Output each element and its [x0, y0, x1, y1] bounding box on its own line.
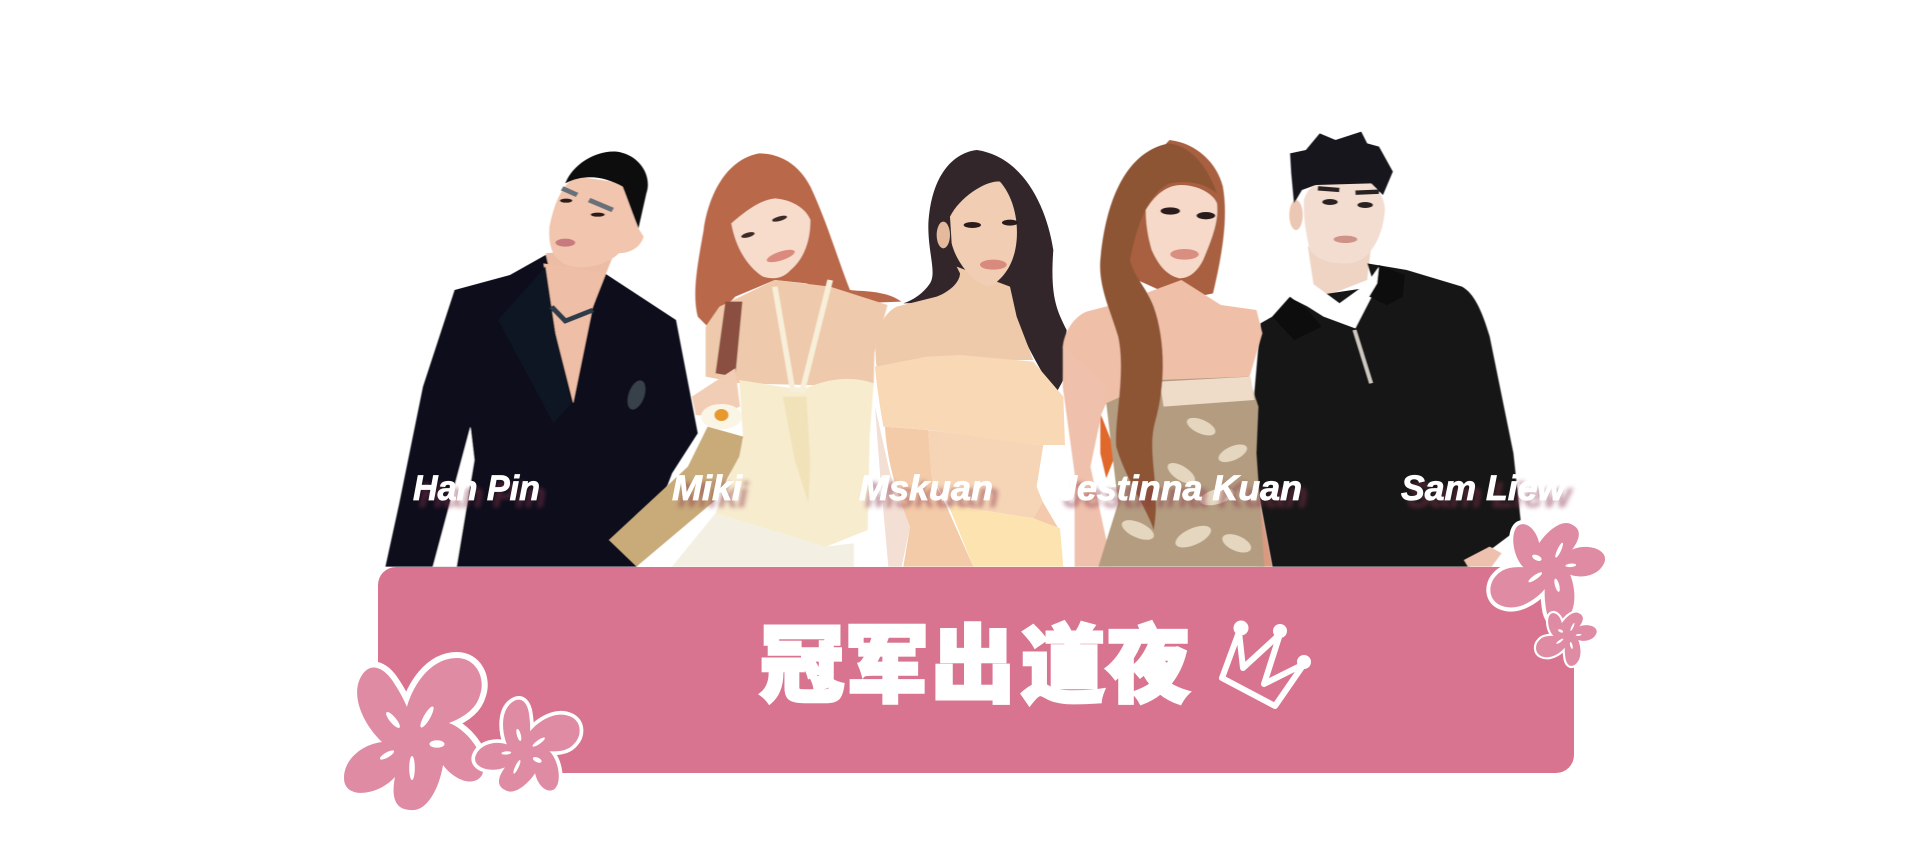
right arm	[1254, 473, 1272, 567]
face	[549, 177, 644, 267]
name: Mskuan: Mskuan	[859, 469, 993, 508]
white t-shirt	[1288, 267, 1383, 328]
ear	[937, 222, 950, 248]
torso	[928, 430, 1043, 518]
person: Sam Liew	[1251, 132, 1521, 567]
dress band	[1160, 377, 1254, 407]
sweater	[1251, 263, 1521, 567]
shoulders and chest	[706, 280, 887, 387]
shoulders and neck	[876, 267, 1033, 367]
orange background scrap	[1100, 413, 1116, 478]
eyes	[1322, 199, 1338, 205]
bag strap	[716, 302, 742, 377]
person: Miki	[609, 153, 901, 567]
icon: small flower bottom left	[468, 687, 586, 809]
halter straps	[775, 280, 830, 390]
name: Miki: Miki	[672, 469, 743, 508]
lips	[555, 239, 575, 247]
yellow skirt	[948, 505, 1063, 567]
skirt	[672, 513, 854, 567]
waist skin	[1033, 502, 1058, 528]
back hair	[1126, 140, 1225, 300]
icon: crown	[1222, 620, 1311, 706]
lips	[1334, 236, 1357, 243]
title: champion debut night: 冠军出道夜	[760, 619, 1190, 713]
hair	[1290, 132, 1393, 203]
name: Han Pin: Han Pin	[413, 469, 540, 508]
gap between arm and body	[433, 427, 474, 567]
ear	[1289, 200, 1303, 230]
icon: large flower top right	[1484, 504, 1613, 637]
lips	[1170, 249, 1199, 260]
patterned dress	[1098, 377, 1264, 567]
left collar	[1272, 297, 1322, 340]
hair	[903, 150, 1067, 398]
name: Jestinna Kuan: Jestinna Kuan	[1057, 469, 1302, 508]
eyes	[964, 222, 981, 228]
neck	[1308, 247, 1371, 300]
hair	[565, 152, 648, 228]
zipper	[1355, 330, 1371, 383]
skin V neck	[544, 263, 605, 403]
name: Sam Liew: Sam Liew	[1401, 469, 1568, 508]
hand	[1464, 547, 1502, 567]
face	[731, 198, 810, 278]
icon: small flower top right	[1532, 602, 1601, 673]
lapel shade	[498, 267, 571, 423]
name labels	[413, 469, 1568, 508]
person: Jestinna Kuan	[1063, 140, 1272, 567]
icon: large flower bottom left	[344, 658, 483, 810]
pink title banner	[378, 567, 1574, 773]
left arm	[1063, 347, 1112, 567]
person: Han Pin	[385, 152, 698, 567]
off-shoulder sleeve band	[875, 355, 1065, 445]
long hair lock	[1100, 143, 1217, 530]
face	[1146, 185, 1217, 278]
arm	[885, 427, 973, 567]
hand	[692, 368, 740, 417]
face	[1304, 180, 1385, 263]
necklace	[551, 307, 593, 321]
cream top	[716, 379, 874, 547]
straw bag	[609, 427, 743, 567]
eyes	[1160, 207, 1180, 215]
neck	[546, 247, 617, 320]
person: Mskuan	[875, 150, 1067, 567]
brooch	[624, 379, 649, 411]
eyebrows	[1318, 188, 1379, 193]
skin body	[1063, 280, 1262, 473]
face	[950, 182, 1017, 287]
lips	[765, 247, 797, 265]
eyes	[740, 231, 756, 239]
hair	[695, 153, 901, 327]
lips	[980, 260, 1007, 270]
bow	[783, 397, 810, 503]
eyebrows	[562, 188, 613, 210]
right collar	[1369, 265, 1405, 305]
skin sliver	[875, 407, 910, 567]
eyes	[560, 199, 572, 203]
black suit jacket	[385, 255, 698, 567]
flower	[701, 404, 742, 429]
dress leaf texture	[1118, 414, 1255, 556]
